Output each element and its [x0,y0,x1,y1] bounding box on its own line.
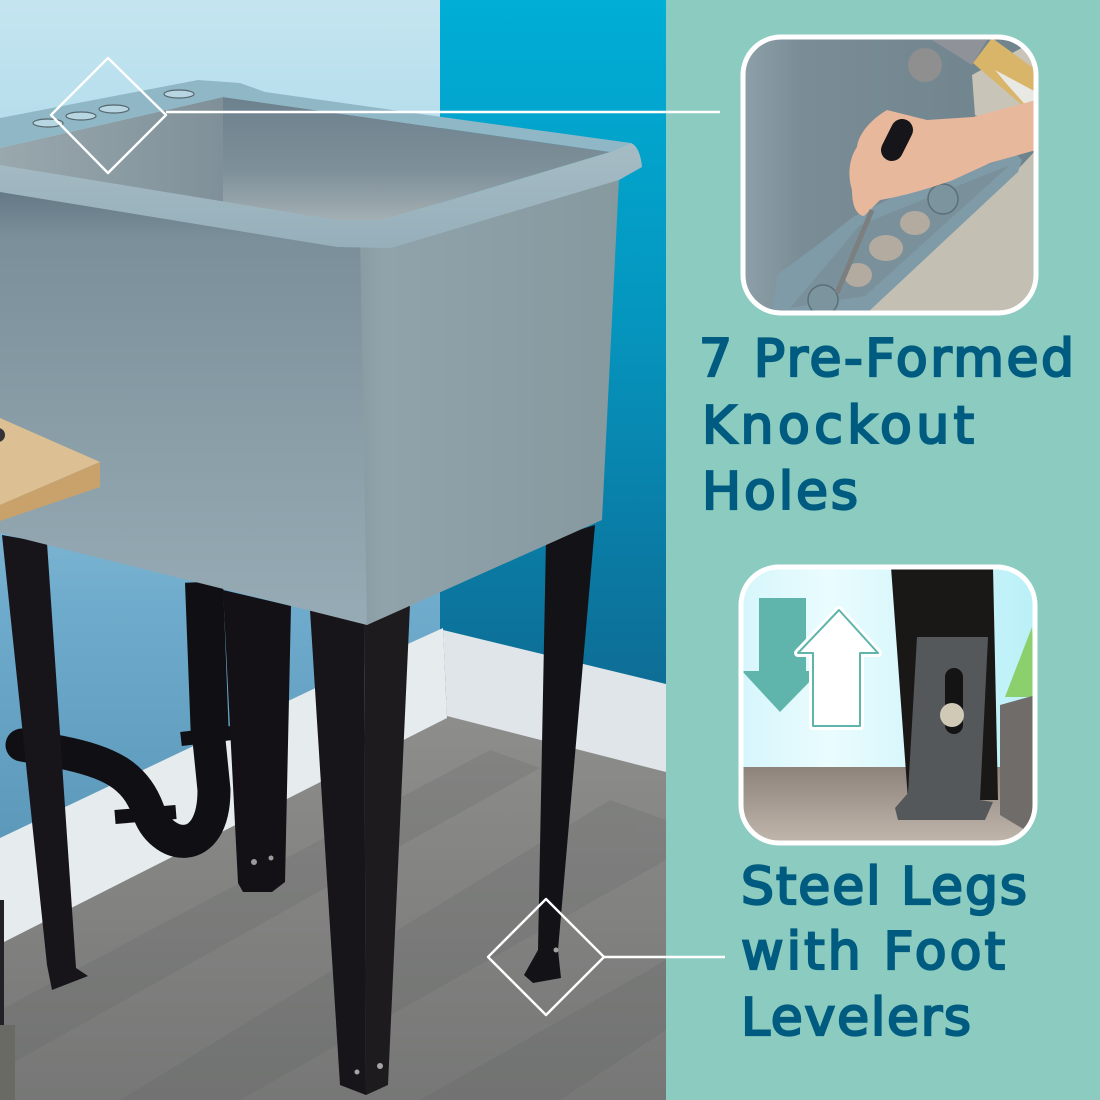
back leg [223,590,291,892]
knockout holes [33,90,194,127]
heading: knockout holes: Knockout [702,396,974,456]
icon: down arrow [742,598,820,712]
panel: product photo [0,0,666,1100]
wooden counter [0,418,100,521]
wood floor [867,150,1036,313]
right baseboard [443,630,666,772]
sink front face [0,180,367,625]
heading: knockout holes: Holes [702,462,858,522]
heading: knockout holes [699,329,1074,522]
callout: foot leveler marker [488,899,725,1015]
panel: teal sidebar background [666,0,1100,1100]
right wall [440,0,666,700]
drain pipe [22,582,232,841]
heading: knockout holes: 7 Pre-Formed [699,329,1074,389]
photo: foot leveler detail [741,567,1036,845]
screwdriver shaft [837,210,872,293]
right leg [524,525,595,983]
heading: steel legs: with Foot [741,922,1005,982]
callout: knockout holes marker [51,58,720,173]
left baseboard [0,628,447,944]
centre leg [310,605,410,1095]
left front leg [2,535,88,990]
heading: steel legs: Steel Legs [741,857,1027,917]
sink basin back wall [223,97,610,220]
sink front rim [0,143,642,248]
knockout discs [808,184,958,315]
heading: steel legs: Levelers [741,988,971,1048]
floor planks [400,750,666,836]
sink side face [350,178,619,625]
heading: steel legs [741,857,1027,1048]
lower left post [0,900,15,1100]
left wall [0,0,445,860]
screwdriver handle [892,130,902,150]
floor [0,705,666,1100]
sink back flange [0,80,631,152]
knockout openings [844,211,930,287]
icon: up arrow [798,610,878,726]
sink flange [772,155,1022,313]
hammer [932,40,987,65]
sink basin left wall [0,97,223,210]
hand [849,100,1036,216]
photo: knockout holes detail [743,37,1036,315]
